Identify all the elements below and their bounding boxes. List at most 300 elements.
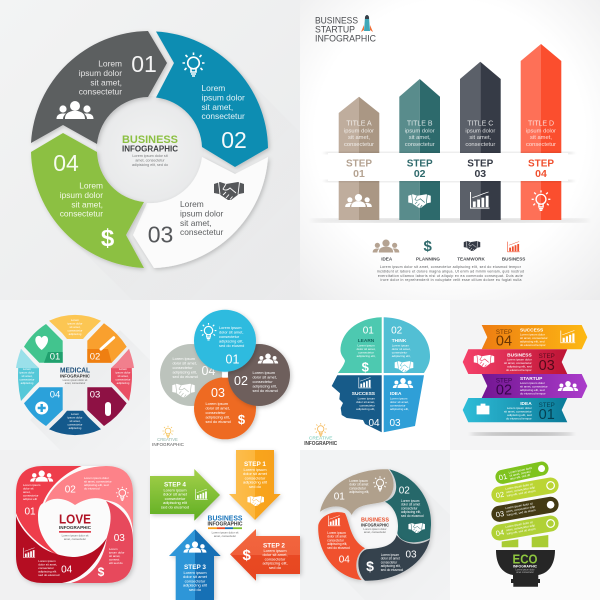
ribbon step 02: STEP <box>496 378 512 385</box>
pill 02: amet, consectetur adip <box>506 485 536 494</box>
center title: MEDICAL <box>60 365 91 374</box>
ribbon step 03: STEP <box>539 353 555 360</box>
circle 04: Lorem ipsum <box>172 356 195 361</box>
ribbon step 01: do eiusmod tempor <box>506 416 532 420</box>
pill 03: 03 <box>495 509 505 519</box>
circle 04: 04 <box>202 364 215 378</box>
ribbon step 02 <box>482 374 587 398</box>
segment 03: Lorem <box>180 199 204 209</box>
title <box>315 16 376 44</box>
swirl 03: sed do eiusmod <box>381 568 403 572</box>
pill 04 <box>490 514 560 542</box>
bulb base <box>496 550 555 587</box>
center title: Lorem ipsum dolor sit <box>132 154 168 158</box>
segment 04: 04 <box>53 150 79 176</box>
circle 02 <box>228 344 290 406</box>
panel: business circular infographic <box>31 31 300 300</box>
circle 03: 03 <box>211 386 225 400</box>
bottom icon row <box>373 238 520 255</box>
arrow step 3 <box>169 529 221 600</box>
circle 01: Lorem ipsum <box>219 325 242 330</box>
pill 03: ising elit, sed do eiusm <box>506 508 536 517</box>
segment 02: adipiscing elit, sed <box>84 483 109 487</box>
step labels: 02 <box>414 168 426 180</box>
swirl 02: sed do eiusmod <box>401 514 424 518</box>
ground shadow <box>310 219 590 222</box>
swirl 03: dolor sit amet <box>381 557 400 561</box>
segment right red <box>111 349 134 401</box>
segment 03 <box>71 501 133 583</box>
arrow D text: sit amet, <box>530 135 552 141</box>
footer paragraph: incididunt ut labore et dolore magna aliqua. Ut enim ad minim veniam, quis nostrud <box>377 269 524 273</box>
arrow step 4 <box>150 469 220 521</box>
segment left teal: consectetur <box>20 378 35 382</box>
panel: love infographic <box>16 466 133 583</box>
pill 01: 01 <box>498 472 508 482</box>
segment 02: Lorem ipsum dolor <box>84 476 109 480</box>
arrow step 1: sed do <box>249 484 262 489</box>
arrow D text: TITLE D <box>528 120 554 128</box>
ribbon step 03: 03 <box>539 358 555 374</box>
swirl 04: dolor sit amet <box>327 535 347 539</box>
circle 03: Lorem ipsum <box>206 401 228 406</box>
arrow A text: ipsum dolor <box>344 128 374 134</box>
pill 01: sit amet, consect <box>509 469 531 478</box>
segment 02: 02 <box>65 484 76 495</box>
segment 01 <box>31 31 167 144</box>
ribbon step 04: Lorem ipsum dolor <box>520 332 545 336</box>
arrow B text <box>405 120 435 148</box>
arrow A <box>339 97 379 220</box>
icon: rocket <box>361 15 373 32</box>
center title <box>59 512 92 541</box>
swirl 02: consectetur <box>401 506 418 510</box>
arrow C text: ipsum dolor <box>465 128 495 134</box>
bulb base: Lorem ipsum dolor <box>515 568 535 572</box>
segment 03: 03 <box>148 222 173 248</box>
quadrant 04 success: SUCCESS <box>352 391 376 397</box>
circle 01 <box>194 310 256 372</box>
circle 02: consectetur <box>252 379 273 384</box>
swirl 01: consectetur <box>349 486 367 490</box>
pill 02: ising elit, sed do eiusm <box>506 489 536 498</box>
arrow step 2 <box>230 529 300 581</box>
arrow step 4: dolor sit amet <box>163 492 188 497</box>
arrow B text: sit amet, <box>409 135 431 141</box>
quadrant 02 think: consectetur <box>392 350 407 354</box>
ribbon step 01: sit amet, consectetur <box>504 410 532 414</box>
quadrant 04 success: consectetur <box>359 404 375 408</box>
segment 04: consectetur <box>60 209 103 219</box>
footer paragraph: Lorem ipsum dolor sit amet, consectetur adipiscing elit, sed do eiusmod tempor <box>380 265 522 269</box>
arrow B text: TITLE B <box>407 120 433 128</box>
bottom icon labels: TEAMWORK <box>457 256 485 262</box>
swirl 02: Lorem ipsum <box>401 499 420 503</box>
step labels: STEP <box>528 158 554 170</box>
pill 04: Lorem ipsum dolor sit <box>505 520 533 529</box>
segment 02: do eiusmod <box>84 486 100 490</box>
step labels <box>346 158 554 180</box>
arrow step 3: Lorem ipsum <box>183 570 207 575</box>
circle 02: sed do eiusmd <box>252 388 278 393</box>
segment 01: adipisc elit <box>23 497 37 501</box>
quadrant 01 learn: $ <box>362 360 370 374</box>
pill 02: Lorem ipsum dolor sit <box>505 482 533 491</box>
pill 02: 02 <box>495 490 505 500</box>
swirl 01: 01 <box>334 491 345 502</box>
segment 03: consect <box>109 558 120 562</box>
creative logo: CREATIVE <box>309 435 333 441</box>
arrow step 3: adipiscing elit <box>183 583 208 588</box>
segment 01: consectetur <box>23 494 39 498</box>
segment right red: consectetur <box>116 378 131 382</box>
circle 04 <box>160 344 222 406</box>
title: BUSINESS <box>315 16 358 26</box>
ribbon step 04: 04 <box>496 334 512 350</box>
segment top yellow: ipsum dolor <box>68 322 83 326</box>
title: INFOGRAPHIC <box>315 34 376 44</box>
segment 03: elit sed do <box>109 561 123 565</box>
quadrant 02 think: Lorem ipsum <box>392 344 410 348</box>
quadrant 01 learn: consectetur <box>358 350 374 354</box>
ribbon step 03: Lorem ipsum dolor <box>507 358 532 362</box>
quadrant 01 learn: 01 <box>363 326 374 337</box>
segment bottom navy: adipiscing <box>69 426 82 430</box>
panel: swirl circle infographic <box>318 469 450 600</box>
ribbon step 02: Lorem ipsum dolor <box>520 381 545 385</box>
segment 02 <box>45 466 133 531</box>
quadrant 04 success: 04 <box>368 418 380 429</box>
pill 03: Lorem ipsum dolor sit <box>505 501 533 510</box>
icon: handshake <box>408 194 431 208</box>
segment 02: sit amet, consectetur <box>84 480 112 484</box>
segment bottom navy: sit amet, <box>70 419 81 423</box>
circle 01: 01 <box>226 352 239 366</box>
circle 04: sed do eiusmd <box>172 374 198 379</box>
segment 03: sit amet, <box>180 218 212 228</box>
segment top yellow: consectetur <box>68 328 83 332</box>
arrow C text: TITLE C <box>467 120 493 128</box>
ribbon step 03: do eiusmod tempor <box>506 368 532 372</box>
arrow D text: consectetur <box>526 142 556 148</box>
panel: medical infographic <box>16 315 150 450</box>
ribbon step 02: 02 <box>496 382 512 398</box>
arrow step 2: dolor sit amet, <box>262 552 288 557</box>
bottom icon labels: IDEA <box>381 256 393 262</box>
arrow step 4: Lorem ipsum <box>163 488 187 492</box>
arrow step 4: STEP 4 <box>164 482 186 489</box>
panel: startup infographic <box>310 15 590 282</box>
segment 02 orange: 02 <box>90 351 100 362</box>
center title: amet, consectetur <box>364 530 386 534</box>
ribbon step 04: sit amet, consectetur <box>520 336 548 340</box>
arrow step 1: Lorem ipsum <box>243 467 267 472</box>
segment right red: sit amet, <box>118 374 129 378</box>
swirl 03: 03 <box>405 550 417 561</box>
segment left teal: Lorem <box>23 367 32 371</box>
ribbon step 03: sit amet, consectetur <box>504 361 532 365</box>
arrow B text: consectetur <box>405 142 435 148</box>
white band <box>325 152 573 182</box>
icon: chart <box>470 192 490 208</box>
bottom icon labels: BUSINESS <box>502 256 525 262</box>
segment left teal: ipsum dolor <box>20 370 35 374</box>
circle 01: dolor sit amet, <box>219 330 243 334</box>
segment 04 <box>31 133 144 268</box>
segment 01 green: 01 <box>50 351 60 362</box>
ribbon step 01: IDEA <box>520 401 532 407</box>
step labels: STEP <box>346 158 372 170</box>
bottom icon labels <box>381 256 525 262</box>
segment 04: consectetur <box>38 566 54 570</box>
segment 03: ipsum dolor <box>109 550 125 554</box>
arrow A text: consectetur <box>344 142 374 148</box>
center title <box>361 518 390 534</box>
arrow B text: ipsum dolor <box>405 128 435 134</box>
quadrant 01 learn: dolor sit amet, <box>357 347 376 351</box>
segment right red: ipsum dolor <box>116 370 131 374</box>
circle 03: dolor sit amet, <box>206 406 230 410</box>
center title <box>208 514 243 538</box>
swirl 04: Lorem ipsum <box>327 531 346 535</box>
panel: startup arrows background <box>300 0 600 300</box>
circle 03: adipiscing elit, <box>206 414 230 420</box>
arrow C text <box>465 120 495 148</box>
quadrant 02 think: adipiscing elit, <box>392 354 411 358</box>
step labels: STEP <box>467 158 493 170</box>
ribbon step 02: do eiusmod tempor <box>520 392 546 396</box>
arrow step 2: sed do <box>269 565 282 570</box>
creative logo: INFOGRAPHIC <box>152 442 185 447</box>
circle 02: Lorem ipsum <box>252 370 275 375</box>
bottom icon labels: PLANNING <box>416 256 440 262</box>
panel: medical background <box>0 300 150 450</box>
swirl 03 <box>358 535 430 581</box>
swirl 02: adipiscing elit, <box>401 510 421 514</box>
segment 01: Lorem <box>98 58 122 68</box>
center title: Lorem ipsum dolor sit <box>63 378 88 382</box>
segment top yellow: sit amet, <box>70 325 81 329</box>
ribbon step 01: 01 <box>539 407 555 423</box>
swirl 03: $ <box>366 558 374 574</box>
center title: INFOGRAPHIC <box>122 144 178 154</box>
creative logo: INFOGRAPHIC <box>304 441 337 447</box>
quadrant 01 learn <box>338 317 382 374</box>
center title <box>122 134 179 167</box>
segment 03: consectetur <box>180 227 224 237</box>
circle 03: sed do eiusmd <box>206 419 231 424</box>
segment bottom navy: ipsum dolor <box>68 416 83 420</box>
segment 04: dolor sit amet, <box>38 562 57 566</box>
ribbon step 04: STEP <box>496 329 512 336</box>
panel: step ribbons infographic <box>463 325 587 436</box>
quadrant 01 learn: adipiscing elit, <box>357 354 376 358</box>
panel: business circle background <box>0 0 300 300</box>
panel: eco bulb infographic <box>490 460 560 587</box>
panel: arrows background <box>150 450 300 600</box>
panel: four arrows infographic <box>150 450 300 600</box>
pill 03 <box>490 496 560 523</box>
pill 01: tetur elit, sed do <box>510 473 531 481</box>
center title: LOVE <box>59 512 91 527</box>
arrow step 2: STEP 2 <box>263 543 285 550</box>
arrow step 2: $ <box>243 547 252 564</box>
segment 01: dolor sit <box>23 486 34 490</box>
center title: adipisicing elit, sed do <box>132 163 168 167</box>
swirl 04: consectetur <box>327 538 345 542</box>
swirl 02 <box>385 469 431 542</box>
swirl 03: Lorem ipsum <box>381 553 399 557</box>
panel: love background <box>0 450 150 600</box>
quadrant 01 learn: Lorem ipsum <box>357 344 375 348</box>
ribbon step 03 <box>463 349 567 374</box>
center title: INFOGRAPHIC <box>361 522 390 527</box>
step labels: 01 <box>353 168 365 180</box>
quadrant 04 success: Lorem ipsum <box>358 396 375 400</box>
pill 01: Lorem ipsum dolor <box>508 466 533 475</box>
swirl 01: dolor sit amet <box>349 483 369 487</box>
arrow step 1 <box>229 450 281 520</box>
segment 03: 03 <box>114 533 125 544</box>
center square <box>222 372 228 378</box>
arrow step 1: dolor sit amet <box>243 471 268 476</box>
inner disc <box>96 96 204 204</box>
segment top yellow: Lorem <box>71 318 80 322</box>
segment 04 <box>16 516 107 583</box>
arrow step 3: sed do <box>189 587 202 592</box>
center title: amet, consectetur <box>214 534 236 538</box>
swirl 02: 02 <box>399 486 410 497</box>
quadrant 04 success: dolor sit amet, <box>356 400 375 404</box>
segment top yellow: adipiscing <box>69 332 82 336</box>
segment 01: 01 <box>131 51 157 77</box>
arrow step 3: dolor sit amet <box>183 574 208 579</box>
swirl 02: dolor sit amet <box>401 503 420 507</box>
center title: Lorem ipsum dolor sit <box>212 530 239 534</box>
center title: amet, consectetur <box>135 158 165 162</box>
segment bottom navy: Lorem <box>71 412 80 416</box>
quadrant 03 idea: IDEA <box>390 391 402 397</box>
arrow step 1: consectetur <box>245 475 266 480</box>
segment 03: $ <box>98 565 105 579</box>
segment right red: adipiscing <box>117 381 130 385</box>
segment 04: $ <box>101 225 115 252</box>
segment bottom navy <box>49 411 101 435</box>
ribbon step 01 <box>463 398 567 423</box>
circle 01: sed do eiusmd <box>219 343 244 348</box>
arrow C text: sit amet, <box>469 135 492 141</box>
ribbon step 03: BUSINESS <box>507 352 532 358</box>
segment 01 <box>16 466 82 557</box>
segment 03: ipsum dolor <box>180 208 224 218</box>
quadrant 02 think: dolor sit amet, <box>392 347 411 351</box>
segment 04: sit amet, <box>71 199 103 209</box>
quadrant 02 think: THINK <box>392 338 407 344</box>
circle 02: 02 <box>234 374 248 388</box>
arrow D text <box>526 120 556 148</box>
pill 04: ising elit, sed do eiusm <box>506 527 536 536</box>
arrow step 4: sed do eiusmod <box>161 504 189 509</box>
segment left teal <box>16 349 39 401</box>
step labels: 03 <box>474 168 486 180</box>
footer paragraph: exercitation ullamco laboris nisi ut aliquip ex ea commodo consequat. Duis aute <box>378 274 523 278</box>
swirl 01 <box>320 469 394 515</box>
swirl 04: adipiscing elit, <box>327 542 347 546</box>
segment 02: consectetur <box>202 111 245 121</box>
circle 02: dolor sit amet, <box>252 374 277 380</box>
arrow B <box>399 79 440 220</box>
circle 04: consectetur <box>172 365 193 370</box>
arrow step 4: adipiscing elit <box>163 500 188 505</box>
swirl 03: adipiscing elit, <box>381 564 401 568</box>
circle 01: adipiscing elit, <box>219 338 243 344</box>
center title: Lorem ipsum dolor <box>363 527 387 531</box>
center title: INFOGRAPHIC <box>59 525 92 530</box>
title: STARTUP <box>315 25 355 35</box>
segment 01: consectetur <box>79 87 122 97</box>
circle 02: adipiscing elit, <box>252 384 277 388</box>
quadrant 03 idea: Lorem ipsum <box>390 396 408 400</box>
ribbon step 02: adipiscing elit, sed <box>520 388 545 392</box>
swirl 04: sed do eiusmod <box>327 546 350 550</box>
swirl 01: adipiscing elit, <box>349 490 369 494</box>
circle 03: $ <box>238 412 246 427</box>
segment top yellow <box>49 315 101 339</box>
pill 04: amet, consectetur adip <box>506 523 536 532</box>
center title: BUSINESS <box>208 514 242 523</box>
segment 04: 04 <box>61 564 73 575</box>
segment 04: sed do eiusmod <box>38 573 60 577</box>
segment 04 blue: 04 <box>50 390 60 400</box>
arrow step 2: adipiscing elit, <box>262 561 288 566</box>
quadrant 04 success: adipiscing elit, <box>356 407 375 411</box>
creative logo <box>152 426 185 447</box>
ribbon step 04: adipiscing elit, sed <box>520 340 545 344</box>
segment 02: ipsum dolor <box>202 92 245 102</box>
ribbon step 02: sit amet, consectetur <box>520 385 548 389</box>
segment 02: sit amet, <box>202 102 233 112</box>
arrow A text: sit amet, <box>348 135 370 141</box>
segment 01: 01 <box>24 506 36 517</box>
ribbon step 04: SUCCESS <box>520 328 544 334</box>
ribbon step 04 <box>482 325 587 350</box>
segment 02 <box>156 32 268 167</box>
segment bottom navy: consectetur <box>68 422 83 426</box>
arrow D text: ipsum dolor <box>526 128 556 134</box>
center title <box>60 365 91 385</box>
prongs <box>502 535 548 547</box>
segment 03: sit amet, <box>109 554 121 558</box>
segment 03: Lorem <box>109 547 118 551</box>
segment right red: Lorem <box>119 367 128 371</box>
creative logo: CREATIVE <box>157 437 178 442</box>
ribbon step 01: STEP <box>539 402 555 409</box>
center title: BUSINESS <box>361 518 389 524</box>
arrow step 1: adipiscing elit <box>243 480 268 485</box>
center disc <box>350 501 400 551</box>
white heart base <box>16 466 133 583</box>
quadrant 03 idea: adipiscing elit, <box>390 407 409 411</box>
arrow D <box>521 44 561 220</box>
quadrant 03 idea: consectetur <box>390 404 406 408</box>
panel: eco bulb background <box>450 450 600 600</box>
quadrant 02 think <box>384 317 430 373</box>
ribbon step 02: STARTUP <box>520 376 543 382</box>
segment 01: sit amet, <box>90 77 122 87</box>
quadrant 01 learn: LEARN <box>358 338 375 344</box>
segment 04: Lorem ipsum <box>38 559 56 563</box>
arrow step 2: consectetur <box>265 556 286 561</box>
